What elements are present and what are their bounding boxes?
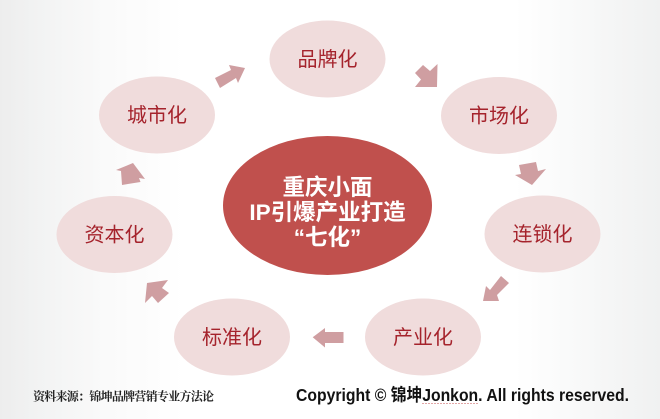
arrow: 品牌化 to 市场化 <box>415 64 438 87</box>
node: 连锁化 <box>484 196 600 272</box>
center ellipse with title: “七化” <box>294 225 361 250</box>
arrow: 标准化 to 资本化 <box>145 280 169 303</box>
center ellipse with title: IP引爆产业打造 <box>249 200 406 225</box>
copyright: Copyright © 锦坤Jonkon. All rights reserved. <box>296 385 629 405</box>
node: 市场化: 市场化 <box>469 104 529 128</box>
node: 品牌化 <box>270 20 386 98</box>
node: 市场化 <box>441 77 557 154</box>
node: 标准化: 标准化 <box>202 326 262 349</box>
node: 资本化: 资本化 <box>84 224 144 246</box>
node: 产业化: 产业化 <box>393 326 453 349</box>
center ellipse with title <box>223 136 432 275</box>
node: 产业化 <box>365 298 481 376</box>
node: 城市化 <box>99 76 215 154</box>
node: 城市化: 城市化 <box>127 104 187 127</box>
node: 品牌化: 品牌化 <box>298 48 358 71</box>
node: 连锁化: 连锁化 <box>512 223 572 246</box>
source note: 资料来源：锦坤品牌营销专业方法论 <box>33 388 214 404</box>
arrow: 城市化 to 品牌化 <box>215 65 245 88</box>
arrow: 连锁化 to 产业化 <box>483 276 509 301</box>
node: 标准化 <box>174 298 290 376</box>
node: 资本化 <box>56 196 172 273</box>
arrow: 资本化 to 城市化 <box>116 163 145 185</box>
arrow: 市场化 to 连锁化 <box>515 162 546 185</box>
center ellipse with title: 重庆小面 <box>282 175 373 200</box>
arrow: 产业化 to 标准化 <box>313 328 344 348</box>
